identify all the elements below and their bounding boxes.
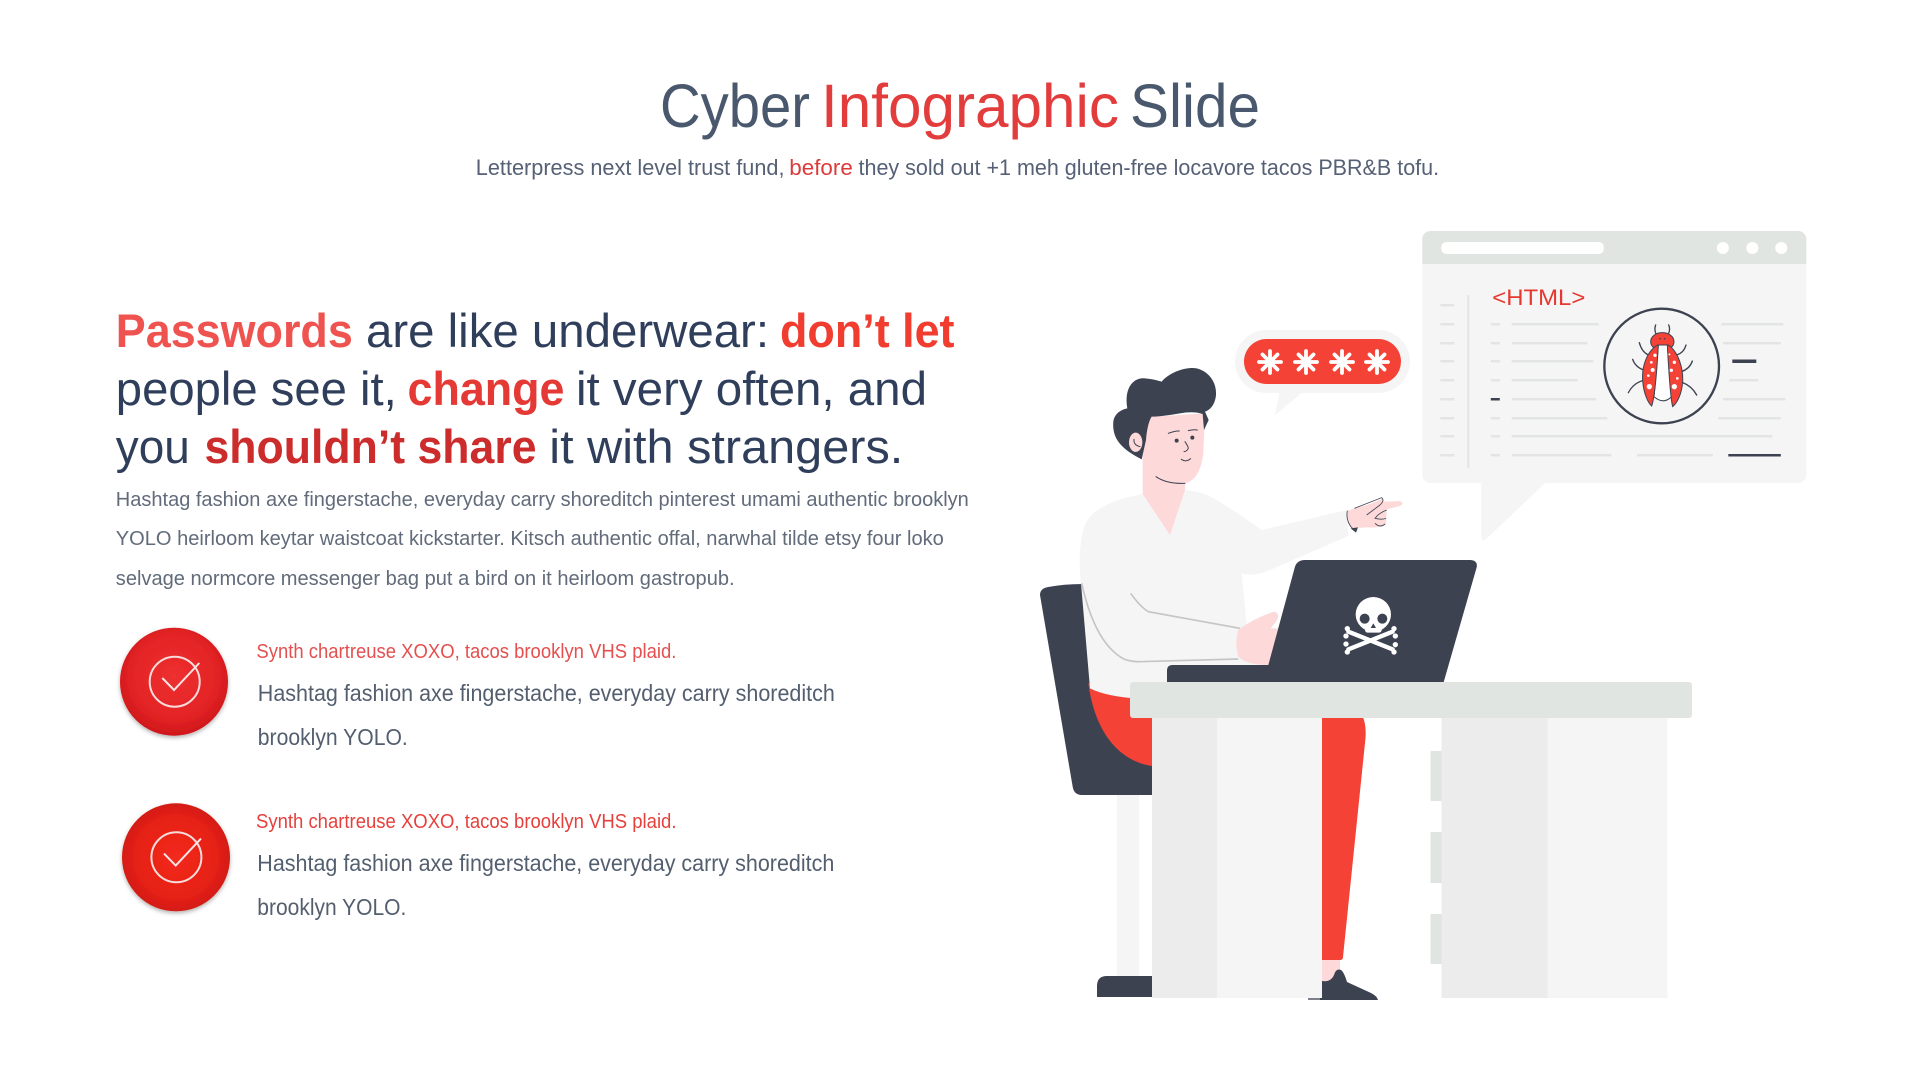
ear bbox=[1129, 433, 1142, 452]
title: Slide bbox=[1130, 72, 1260, 140]
feature item 2 text bbox=[256, 811, 834, 920]
shirt fold lines bbox=[1082, 583, 1240, 662]
feature item 2 text: brooklyn YOLO. bbox=[257, 894, 406, 920]
password asterisks bbox=[1259, 351, 1388, 373]
body paragraph: YOLO heirloom keytar waistcoat kickstarter. Kitsch authentic offal, narwhal tilde etsy four loko bbox=[116, 528, 944, 550]
speech bubble: password bbox=[1235, 330, 1410, 415]
icon: skull and crossbones bbox=[1343, 597, 1398, 655]
hair bbox=[1113, 368, 1216, 459]
shoe bbox=[1308, 970, 1378, 1000]
feature item 1 text bbox=[256, 641, 835, 750]
icon: check badge 2 bbox=[122, 803, 230, 911]
heading: password quote: it very often, and bbox=[576, 362, 927, 415]
pants thigh bbox=[1088, 683, 1157, 767]
subtitle: they sold out +1 meh gluten-free locavore tacos PBR&B tofu. bbox=[858, 155, 1439, 180]
subtitle bbox=[476, 155, 1439, 180]
feature item 2 text: Hashtag fashion axe fingerstache, everyday carry shoreditch bbox=[257, 850, 834, 876]
body paragraph bbox=[116, 489, 969, 590]
icon: check badge 1 bbox=[120, 628, 228, 736]
feature item 1 text: Hashtag fashion axe fingerstache, everyday carry shoreditch bbox=[258, 680, 835, 706]
ankle bbox=[1318, 960, 1340, 984]
heading: password quote: people see it, bbox=[116, 362, 397, 415]
shirt bbox=[1080, 490, 1348, 699]
subtitle: Letterpress next level trust fund, bbox=[476, 155, 784, 180]
desk top bbox=[1130, 682, 1692, 718]
figure: man at desk bbox=[1040, 368, 1477, 795]
heading: password quote: Passwords bbox=[116, 304, 353, 357]
feature item 1 text: Synth chartreuse XOXO, tacos brooklyn VHS plaid. bbox=[256, 641, 676, 663]
panel: browser window bbox=[1422, 231, 1806, 540]
subtitle: before bbox=[789, 155, 853, 180]
body paragraph: selvage normcore messenger bag put a bird on it heirloom gastropub. bbox=[116, 568, 735, 590]
chair post bbox=[1117, 790, 1139, 980]
title: Cyber bbox=[660, 72, 810, 140]
laptop bbox=[1167, 560, 1477, 683]
chair foot bbox=[1097, 976, 1160, 997]
dark code marks bbox=[1491, 360, 1781, 456]
feature item 2 text: Synth chartreuse XOXO, tacos brooklyn VHS plaid. bbox=[256, 811, 676, 833]
desk drawer tabs bbox=[1430, 751, 1442, 964]
red trouser leg bbox=[1318, 716, 1366, 960]
feature item 1 text: brooklyn YOLO. bbox=[258, 724, 408, 750]
heading: password quote: are like underwear: bbox=[366, 304, 769, 357]
pointing hand bbox=[1347, 498, 1402, 533]
desk left leg bbox=[1152, 718, 1322, 998]
chair back bbox=[1040, 584, 1157, 795]
heading: password quote: don’t let bbox=[780, 304, 955, 357]
code lines bbox=[1440, 295, 1785, 468]
icon: bug in circle bbox=[1604, 309, 1719, 423]
title: Infographic bbox=[821, 72, 1119, 140]
lower hand bbox=[1236, 612, 1279, 665]
title bbox=[660, 72, 1260, 140]
neck and face bbox=[1143, 413, 1205, 535]
heading: password quote: you bbox=[116, 420, 190, 473]
heading: password quote bbox=[116, 304, 955, 473]
heading: password quote: change bbox=[408, 362, 564, 415]
desk right leg bbox=[1442, 718, 1668, 998]
html tag label: <HTML> bbox=[1492, 285, 1585, 310]
body paragraph: Hashtag fashion axe fingerstache, everyday carry shoreditch pinterest umami authentic brooklyn bbox=[116, 489, 969, 511]
face details bbox=[1134, 430, 1197, 483]
heading: password quote: shouldn’t share bbox=[204, 420, 536, 473]
heading: password quote: it with strangers. bbox=[549, 420, 903, 473]
